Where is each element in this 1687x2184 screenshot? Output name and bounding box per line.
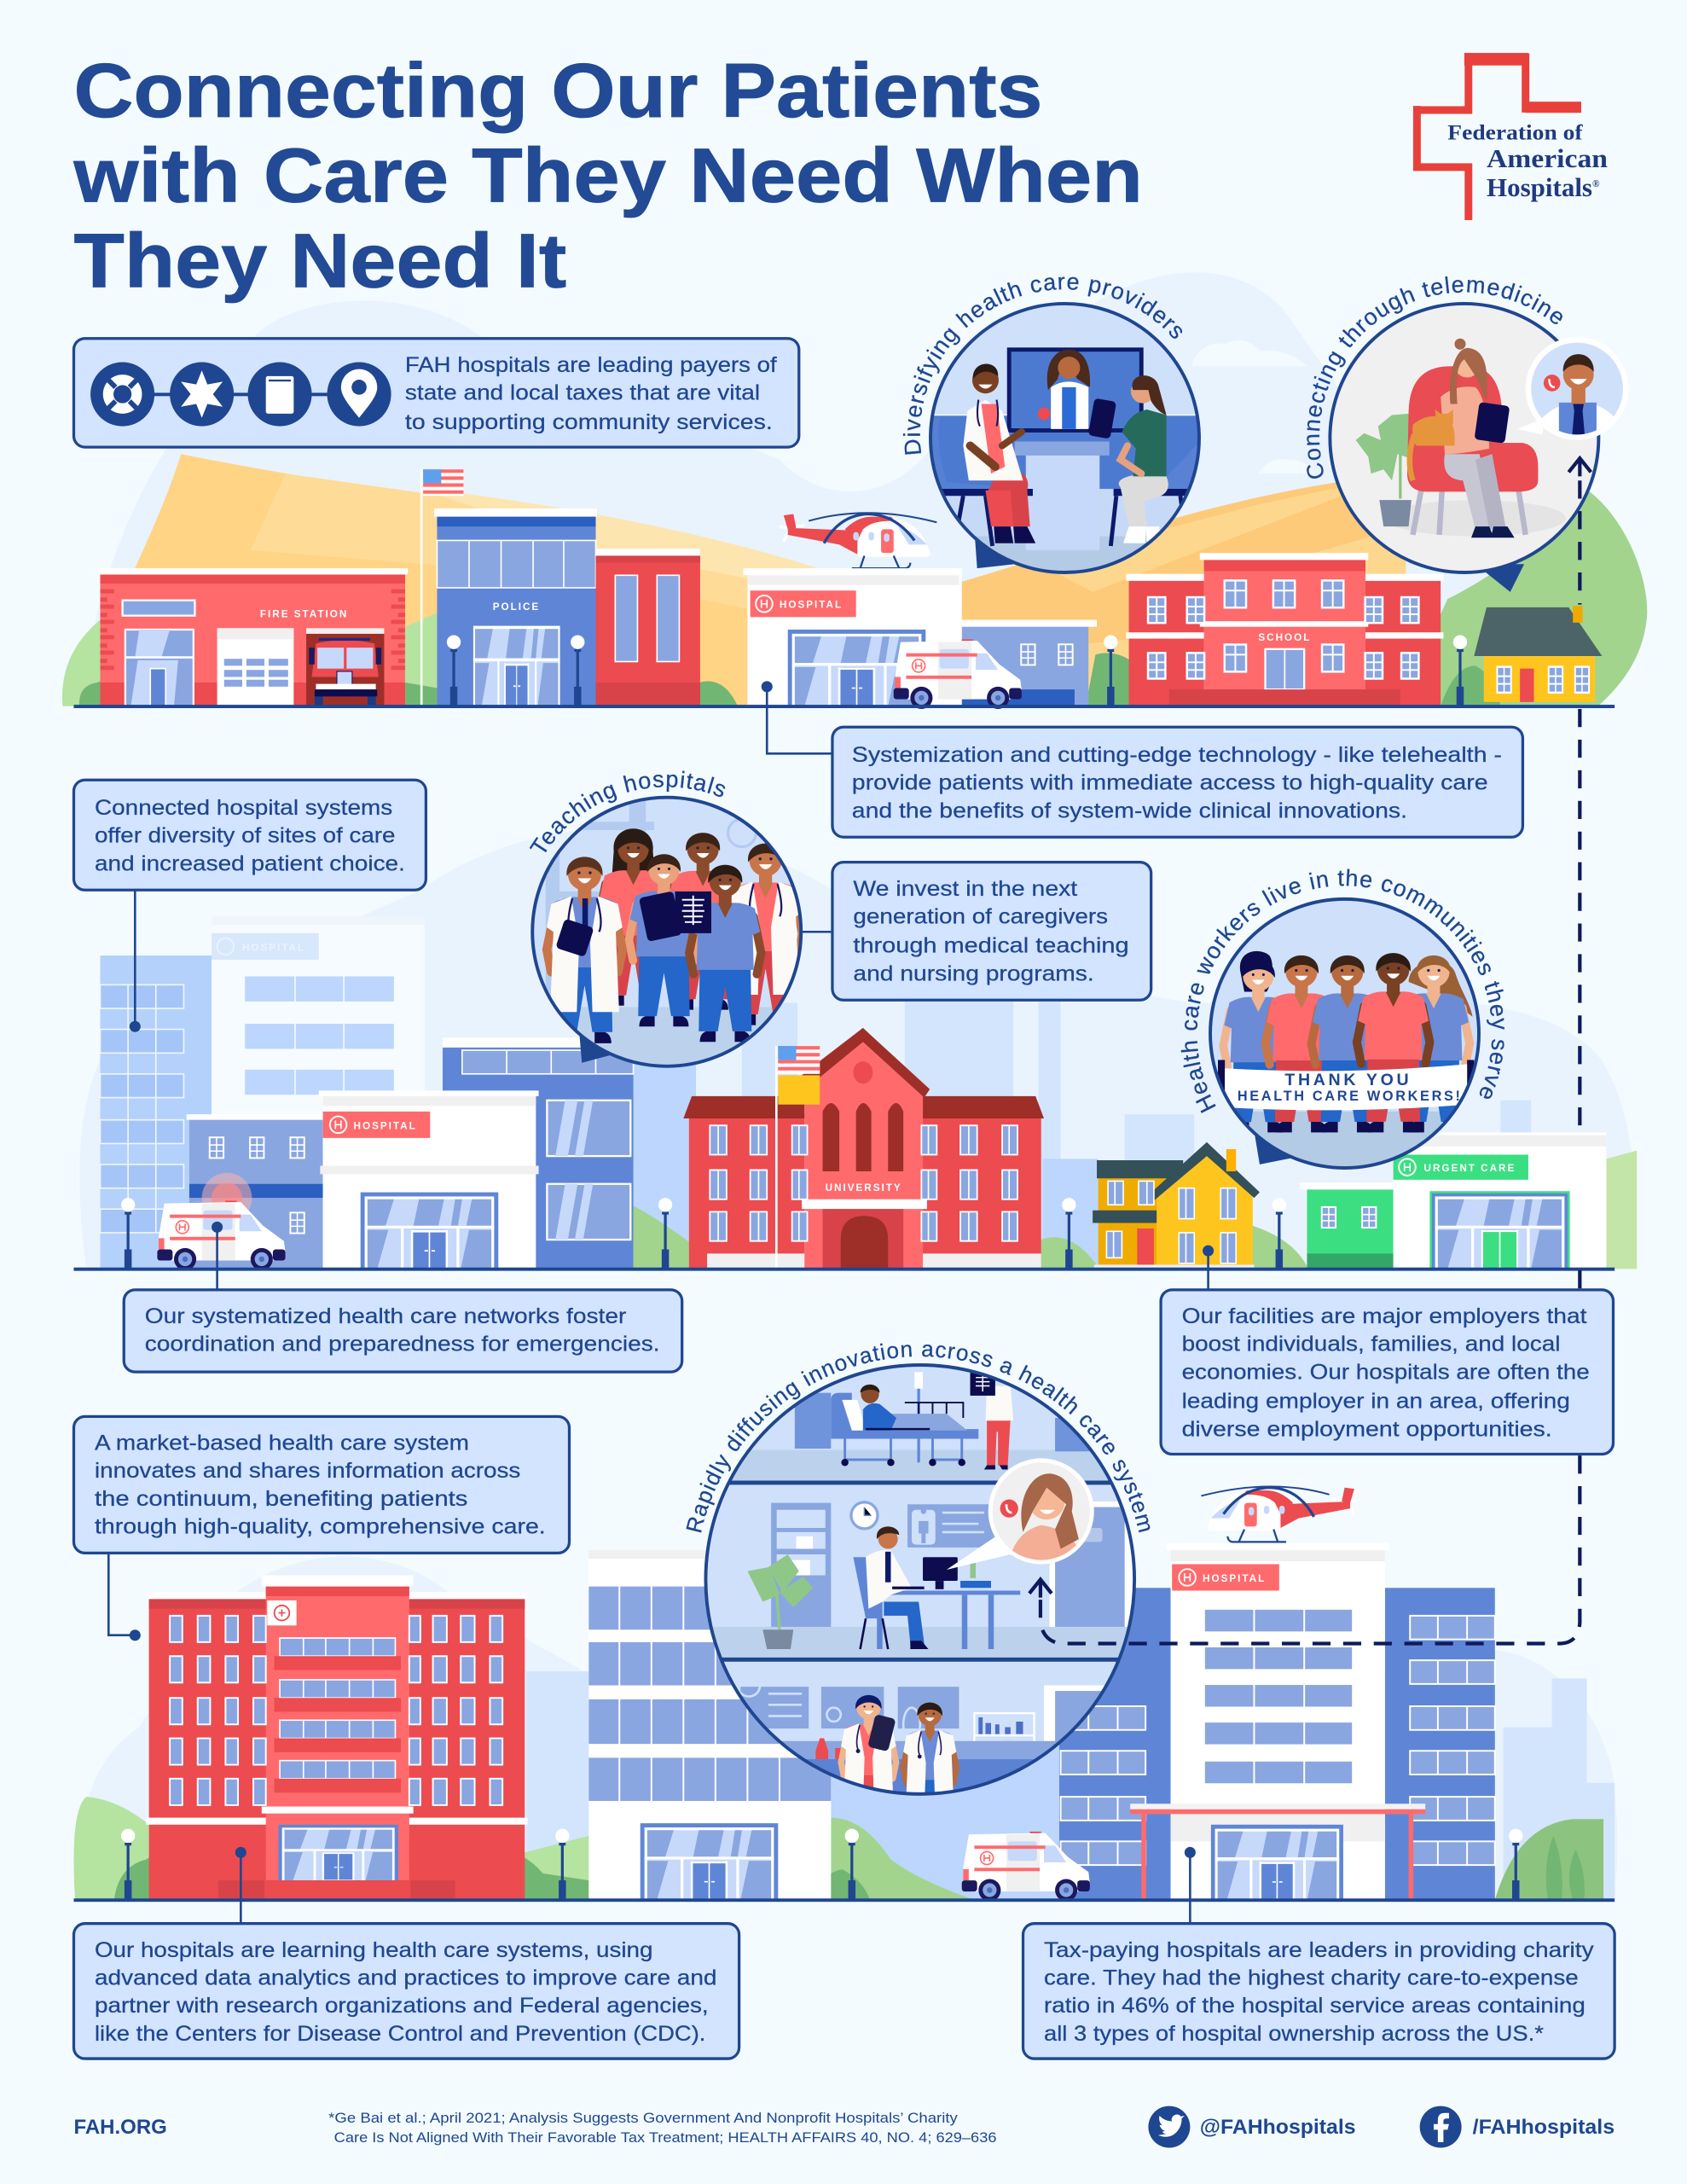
scene 2: pale skyline backdrop [79,828,1637,1269]
icon: ambulance with siren [157,1173,286,1270]
text block: taxes [405,353,778,434]
building: red brick block [596,549,700,706]
scene: nurses behind banner [1218,950,1474,1166]
icon: american flag on pole [420,469,463,706]
panel: next generation caregivers: We invest in the next [853,877,1077,901]
connector lines and dots [108,681,1214,1924]
building: police station [434,508,597,706]
panel: connected hospital systems: offer diversity of sites of care [95,824,395,848]
logo: Federation of American Hospitals: ® [1592,179,1600,189]
panel: market-based system: through high-quality, comprehensive care. [95,1515,546,1539]
panel: learning health care systems [73,1924,739,2059]
scene: care team with x-ray [542,800,800,1065]
footer: twitter handle [1148,2106,1356,2148]
title [72,49,1143,304]
building: yellow houses [1093,1142,1260,1269]
building: blue annex with ambulance bay [187,1114,323,1269]
curved heading: Teaching hospitals [529,771,725,853]
title: Connecting Our Patients [73,49,1042,134]
panel: systemization: Systemization and cutting-edge technology - like telehealth - [852,743,1502,767]
label: urgent care: URGENT CARE [1424,1163,1516,1174]
label: university: UNIVERSITY [826,1182,902,1194]
panel: market-based system: the continuum, benefiting patients [95,1487,467,1511]
scene: patient on armchair [1356,339,1566,537]
dashed arrow: remote care link [1029,458,1591,1644]
icon: fire truck [309,638,381,706]
panel: connected hospital systems: and increased patient choice. [95,851,405,875]
scene 3: pale skyline backdrop [73,1556,1617,1900]
panel: learning health care systems: partner with research organizations and Federal agencies, [95,1994,709,2018]
panel: market-based system [73,1416,569,1553]
panel: systemization [832,727,1522,837]
panel: systematized networks: coordination and preparedness for emergencies. [145,1333,660,1356]
banner: thank you: HEALTH CARE WORKERS! [1238,1089,1460,1104]
text block: taxes: state and local taxes that are vital [405,381,760,405]
panel: market-based system: innovates and shares information across [95,1459,520,1483]
footer: citation: Care Is Not Aligned With Their Favorable Tax Treatment; HEALTH AFFAIRS 40, NO. 4; 629–636 [334,2130,997,2146]
banner: thank you [1225,1064,1467,1110]
icon: map pin [328,362,391,427]
building: school [1126,553,1443,706]
label: hospital: HOSPITAL [780,600,843,611]
text block: taxes: to supporting community services. [405,410,773,434]
building: faded hospital tower [101,916,425,1269]
panel: charity care: all 3 types of hospital ownership across the US.* [1044,2022,1544,2046]
panel: systematized networks [124,1290,682,1372]
panel: major employers: diverse employment opportunities. [1182,1417,1552,1441]
building: red hospital tower [146,1576,528,1900]
icon: book [247,362,312,427]
panel: next generation caregivers: generation of caregivers [853,904,1108,928]
scene: doctor at computer [853,1526,1020,1649]
street lamps row 3 [121,1829,1522,1900]
logo: Federation of American Hospitals: Hospitals [1487,172,1592,202]
icon: plant [1356,414,1414,526]
panel: systemization: and the benefits of system-wide clinical innovations. [852,799,1407,822]
logo: Federation of American Hospitals: Federation of [1447,120,1583,144]
building: yellow house [1474,606,1602,702]
icon: cat [1410,410,1455,480]
panel: charity care [1023,1924,1615,2059]
icon: helicopter over right hospital [1201,1486,1359,1542]
scene 1: pale sky and hills [62,272,1647,706]
panel: systemization: provide patients with immediate access to high-quality care [852,771,1488,795]
icon: ambulance [894,639,1022,709]
panel: learning health care systems: like the Centers for Disease Control and Prevention (CDC). [95,2022,705,2046]
logo: Federation of American Hospitals: American [1487,143,1608,173]
panel: door [1044,1502,1133,1741]
curved heading: Rapidly diffusing innovation across a health care system [686,1343,1150,1532]
call bubble: remote doctor [1517,337,1628,444]
label: school: SCHOOL [1258,632,1311,643]
footer: facebook handle: /FAHhospitals [1473,2116,1615,2139]
scene: three hospital floors [713,1372,1133,1792]
panel: charity care: care. They had the highest charity care-to-expense [1044,1966,1579,1990]
panel: major employers: leading employer in an area, offering [1182,1390,1570,1414]
curved heading: Health care workers live in the communities they serve [1180,868,1504,1113]
footer: twitter handle: @FAHhospitals [1200,2116,1356,2139]
title: with Care They Need When [72,134,1143,219]
circle: diversifying health care providers [902,276,1201,574]
panel on wall: body chart [907,1504,997,1548]
icon: police star [170,362,234,427]
panel: community taxes [73,339,799,447]
building: fire station [96,568,408,706]
person: seated patient [1119,375,1168,543]
label: police: POLICE [493,601,540,613]
street lamps row 1 [447,635,1467,706]
panel: charity care: ratio in 46% of the hospital service areas containing [1044,1994,1586,2018]
circle: teaching hospitals [529,771,803,1068]
panel: major employers: boost individuals, families, and local [1182,1333,1560,1356]
panel: market-based system: A market-based health care system [95,1432,469,1455]
logo: Federation of American Hospitals [1417,53,1608,220]
panel: major employers: economies. Our hospitals are often the [1182,1360,1590,1384]
banner: thank you: THANK YOU [1284,1071,1409,1089]
circle: rapidly diffusing innovation [686,1343,1150,1796]
panel: next generation caregivers: and nursing programs. [853,961,1094,985]
scene: lab floor [740,1687,1056,1792]
panel: charity care: Tax-paying hospitals are leaders in providing charity [1044,1938,1594,1962]
person: doctor with x-ray [971,1372,1013,1469]
building: urgent care [1300,1132,1606,1269]
scene: patient in bed [831,1372,978,1467]
curved heading: Diversifying health care providers [902,276,1182,455]
footer: website: FAH.ORG [73,2116,167,2139]
curved heading: Connecting through telemedicine [1307,276,1562,479]
footer: facebook handle [1420,2106,1615,2148]
building: blue block behind hospital [443,1037,634,1269]
scene: shelf and plant [747,1502,878,1649]
street lamps row 2 [121,1198,1286,1269]
building: hospital middle [319,1090,539,1269]
ground line 1 [73,705,1615,708]
panel: next generation caregivers: through medical teaching [853,934,1129,958]
scene: telehealth consultation [931,347,1197,571]
building: university [683,1028,1044,1269]
ground line 2 [73,1268,1615,1271]
panel: systematized networks: Our systematized health care networks foster [145,1304,626,1328]
icon: ambulance bottom [962,1832,1090,1902]
panel: next generation caregivers [832,863,1151,1000]
footer: citation [328,2111,997,2146]
building: central white hospital wing [588,1550,831,1900]
ground line 3 [73,1898,1615,1902]
panel: learning health care systems: advanced data analytics and practices to improve care and [95,1966,716,1990]
panel: connected hospital systems [73,780,426,890]
footer: citation: *Ge Bai et al.; April 2021; Analysis Suggests Government And Nonprofit Hospitals’ Charity [328,2111,959,2126]
building: hospital with wing [743,568,1097,706]
label: hospital: HOSPITAL [1203,1573,1266,1584]
label: fire station: FIRE STATION [260,608,348,619]
icon: chest x-ray [675,892,711,933]
building: faded hospital tower: HOSPITAL [242,942,305,953]
person: seated doctor [963,364,1035,543]
building: right hospital with blue wings [1059,1543,1495,1900]
circle: connecting through telemedicine [1307,276,1629,592]
icon: lifebuoy [90,362,154,427]
icon: helicopter on hospital roof [780,513,936,568]
label: hospital: HOSPITAL [354,1120,417,1131]
text block: taxes: FAH hospitals are leading payers of [405,353,778,377]
panel: major employers [1161,1290,1614,1454]
panel: major employers: Our facilities are major employers that [1182,1304,1587,1328]
call bubble: patient [947,1458,1094,1570]
circle: health care workers live in the communities [1180,868,1504,1170]
title: They Need It [73,218,566,304]
panel: connected hospital systems: Connected hospital systems [95,796,392,820]
panel: learning health care systems: Our hospitals are learning health care systems, using [95,1938,652,1962]
